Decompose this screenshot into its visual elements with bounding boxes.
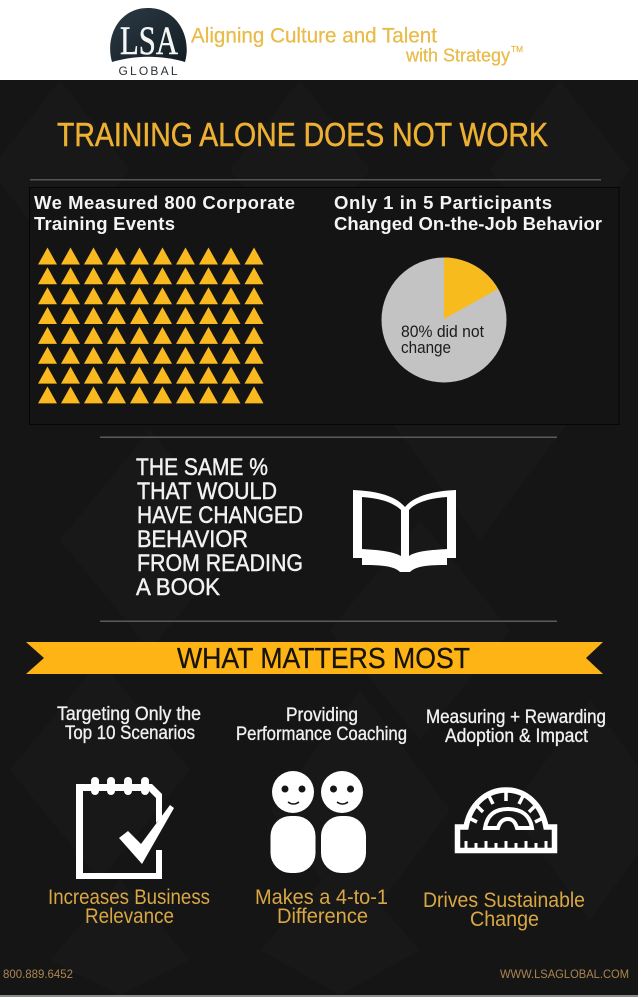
column 2 outcome bbox=[255, 886, 388, 928]
tagline: Aligning Culture and Talent bbox=[191, 24, 437, 48]
column 3 title bbox=[426, 707, 606, 747]
text block: same percent as reading a book: A BOOK bbox=[136, 574, 220, 601]
column 3 title: Measuring + Rewarding bbox=[426, 707, 606, 728]
column 2 outcome: Difference bbox=[277, 905, 368, 928]
column 2 title: Performance Coaching bbox=[236, 724, 407, 745]
banner: what matters most: WHAT MATTERS MOST bbox=[177, 643, 470, 675]
column 3 outcome: Change bbox=[470, 908, 539, 931]
footer: phone number: 800.889.6452 bbox=[3, 969, 73, 981]
text block: same percent as reading a book: THE SAME % bbox=[136, 454, 268, 481]
triangle grid: 800 events bbox=[38, 248, 264, 403]
icon: notepad with check mark bbox=[76, 777, 174, 879]
title: TRAINING ALONE DOES NOT WORK bbox=[57, 116, 548, 153]
text block: same percent as reading a book: FROM READING bbox=[137, 550, 303, 577]
pie chart: 80% did not change: change bbox=[401, 338, 451, 357]
logo: LSA Global: LSA bbox=[120, 18, 178, 63]
column 2 title: Providing bbox=[286, 705, 358, 726]
column 1 outcome: Relevance bbox=[85, 905, 174, 928]
heading: 1 in 5 changed: Changed On-the-Job Behavior bbox=[334, 213, 602, 234]
tagline: TM bbox=[511, 45, 523, 54]
pie chart: 80% did not change bbox=[382, 258, 506, 382]
column 3 title: Adoption & Impact bbox=[445, 726, 589, 747]
icon: open book bbox=[353, 490, 456, 572]
column 3: measuring and rewarding bbox=[423, 707, 606, 931]
column 3 outcome: Drives Sustainable bbox=[423, 889, 585, 912]
icon: protractor bbox=[458, 790, 554, 851]
pie chart: 80% did not change: 80% did not bbox=[401, 322, 484, 341]
column 1: targeting scenarios bbox=[48, 704, 210, 928]
text block: same percent as reading a book: THAT WOULD bbox=[137, 478, 277, 505]
logo: LSA Global bbox=[110, 8, 187, 78]
column 1 outcome: Increases Business bbox=[48, 886, 210, 909]
heading: 800 training events bbox=[34, 192, 295, 234]
column 1 title bbox=[57, 704, 201, 744]
tagline bbox=[191, 24, 523, 66]
footer: website: WWW.LSAGLOBAL.COM bbox=[500, 969, 629, 981]
heading: 800 training events: We Measured 800 Corporate bbox=[34, 192, 295, 213]
text block: same percent as reading a book bbox=[136, 454, 303, 601]
column 2: performance coaching bbox=[236, 705, 407, 928]
heading: 1 in 5 changed bbox=[334, 192, 602, 234]
panel: measurement results bbox=[30, 188, 619, 424]
text block: same percent as reading a book: HAVE CHANGED bbox=[137, 502, 303, 529]
banner: what matters most bbox=[26, 642, 603, 675]
column 2 title bbox=[236, 705, 407, 745]
column 1 title: Targeting Only the bbox=[57, 704, 201, 725]
text block: same percent as reading a book: BEHAVIOR bbox=[137, 526, 248, 553]
column 3 outcome bbox=[423, 889, 585, 931]
heading: 800 training events: Training Events bbox=[34, 213, 175, 234]
tagline: with Strategy bbox=[405, 44, 511, 66]
column 1 title: Top 10 Scenarios bbox=[65, 723, 195, 744]
column 1 outcome bbox=[48, 886, 210, 928]
header band bbox=[0, 0, 638, 80]
heading: 1 in 5 changed: Only 1 in 5 Participants bbox=[334, 192, 552, 213]
logo: LSA Global: GLOBAL bbox=[118, 64, 178, 78]
column 2 outcome: Makes a 4-to-1 bbox=[255, 886, 388, 909]
icon: two people bbox=[270, 771, 366, 873]
